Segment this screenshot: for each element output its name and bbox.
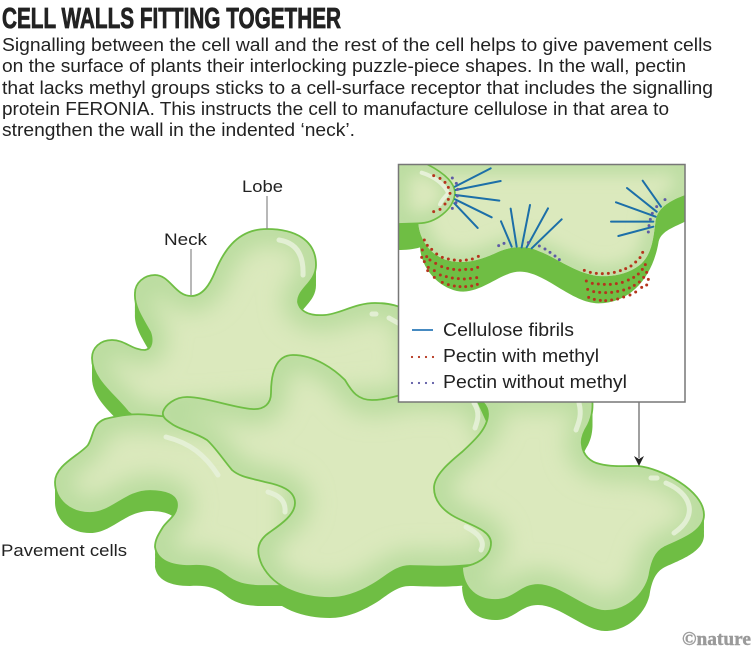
- title: CELL WALLS FITTING TOGETHER: [2, 3, 341, 35]
- neighbouring cell: [398, 164, 455, 224]
- cellulose fibrils: [454, 168, 661, 248]
- intro text block: protein FERONIA. This instructs the cell to manufacture cellulose in that area to: [2, 99, 669, 119]
- label: Pavement cells: Pavement cells: [1, 541, 127, 560]
- legend: pectin without methyl: Pectin without methyl: [443, 372, 627, 392]
- legend: pectin with methyl: Pectin with methyl: [443, 346, 599, 366]
- intro text block: [2, 35, 713, 140]
- pectin with methyl dots: [422, 176, 648, 301]
- inset close-up of cell wall: [398, 164, 685, 303]
- surface highlights: [166, 240, 689, 550]
- intro text block: on the surface of plants their interlocking puzzle-piece shapes. In the wall, pectin: [2, 56, 686, 76]
- cell side walls: [55, 229, 704, 631]
- cell surface: [398, 164, 685, 276]
- label: Neck: [164, 230, 208, 295]
- label: Lobe: Lobe: [242, 177, 283, 196]
- intro text block: strengthen the wall in the indented ‘neck’.: [2, 120, 355, 140]
- top cell surface: [92, 229, 420, 420]
- pectin without methyl dots: [452, 178, 665, 260]
- legend: cellulose fibrils: Cellulose fibrils: [443, 320, 574, 340]
- label: Neck: Neck: [164, 230, 208, 249]
- label: Lobe: [242, 177, 283, 229]
- left cell surface: [55, 414, 300, 586]
- inset panel: [398, 164, 685, 402]
- inset legend: [412, 320, 627, 392]
- arrow from inset to neck: [634, 402, 644, 466]
- cell wall band: [398, 193, 685, 303]
- intro text block: Signalling between the cell wall and the rest of the cell helps to give pavement cells: [2, 35, 712, 55]
- middle cell surface: [163, 355, 500, 598]
- intro text block: that lacks methyl groups sticks to a cell-surface receptor that includes the signalling: [2, 78, 713, 98]
- right cell surface: [434, 395, 704, 611]
- pavement cells illustration: [55, 229, 704, 631]
